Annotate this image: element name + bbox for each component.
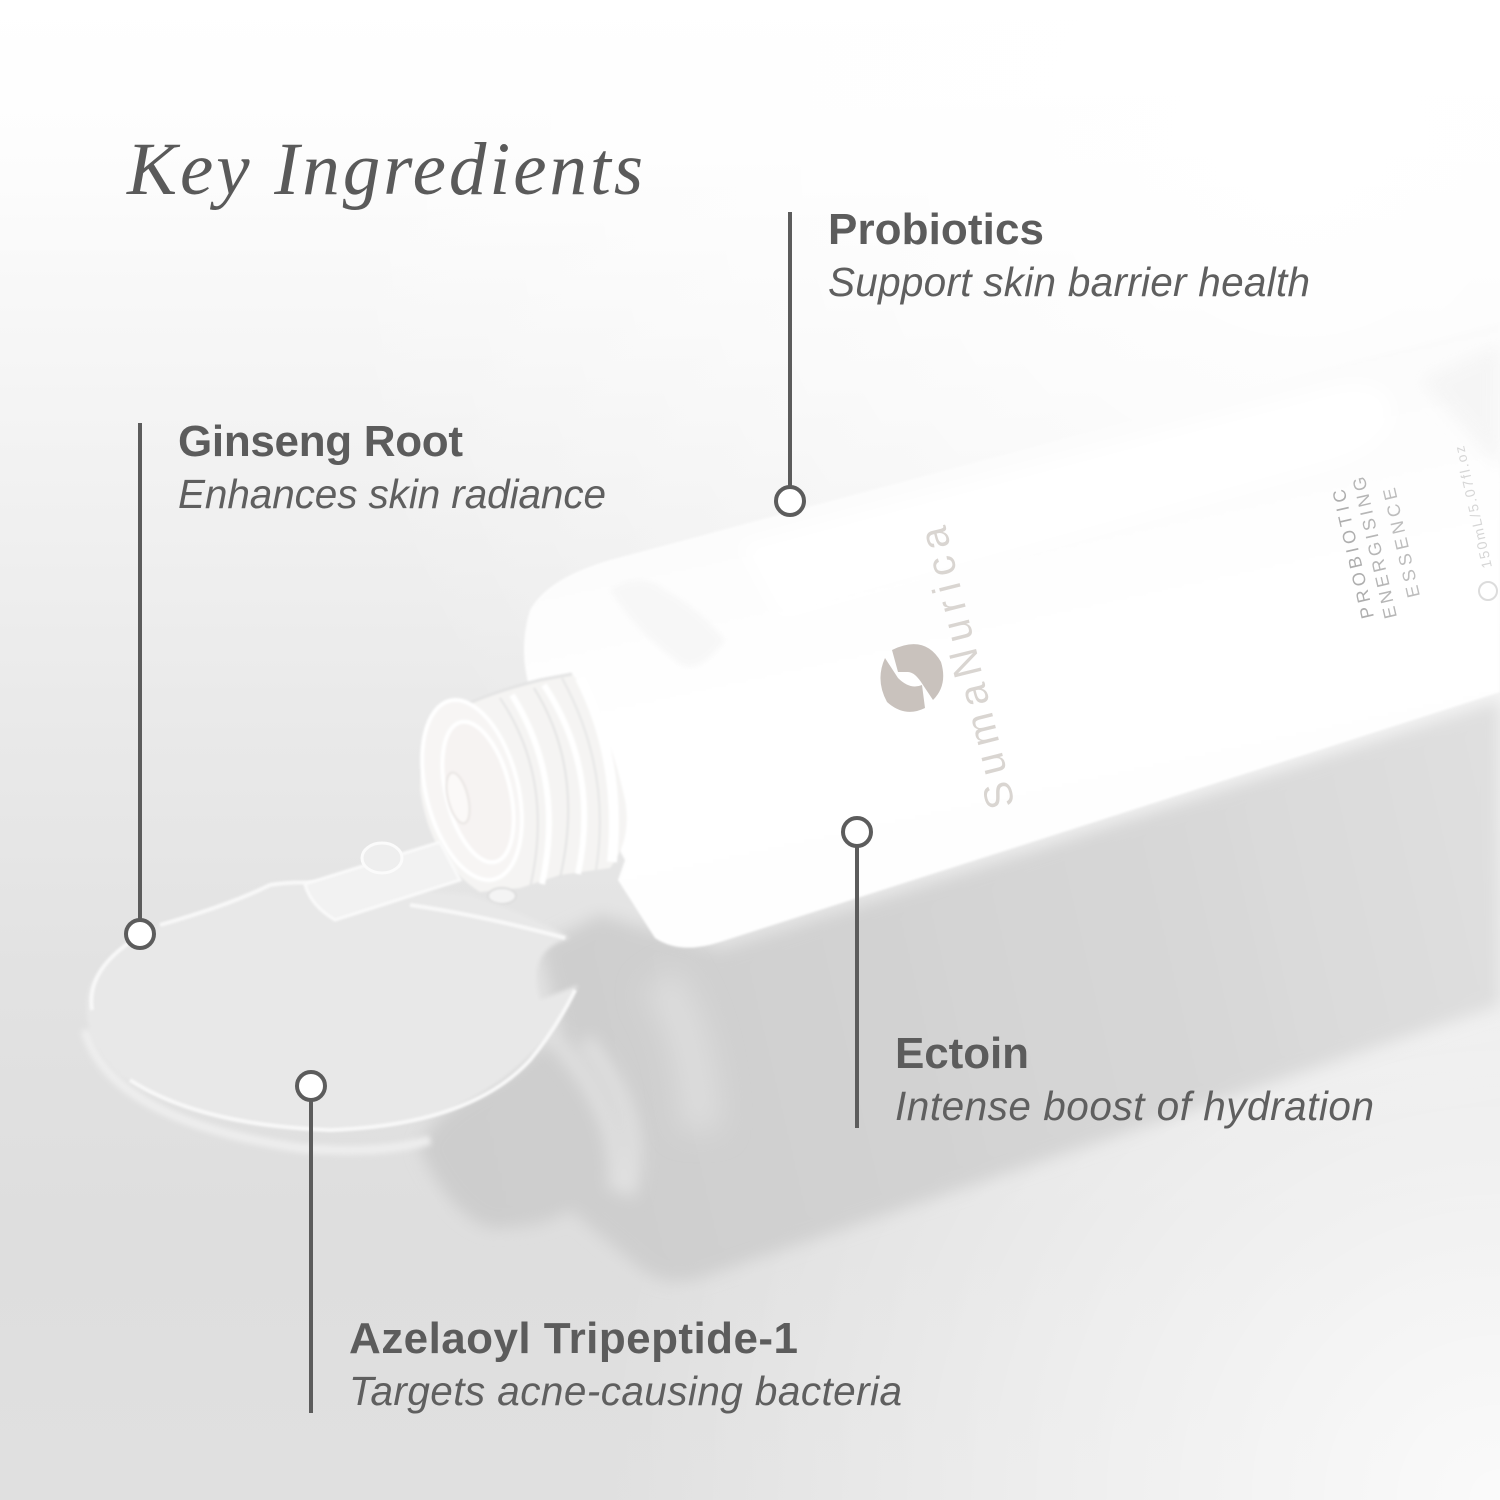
bottle brand logo xyxy=(880,644,943,712)
bottle body xyxy=(524,322,1500,948)
callout: Ginseng Root xyxy=(126,417,606,948)
essence puddle xyxy=(85,842,578,1150)
callout: Probiotics: Probiotics xyxy=(828,205,1044,254)
liquid droplets in shoulder xyxy=(610,580,725,667)
right bottle shade xyxy=(1420,345,1500,470)
callout: Ectoin: Ectoin xyxy=(895,1029,1029,1078)
callout: Ginseng Root: Ginseng Root xyxy=(178,417,463,466)
puddle body xyxy=(86,882,578,1130)
bottle product name xyxy=(1329,475,1424,621)
bottle reflection xyxy=(420,700,1500,1281)
callout: Ectoin xyxy=(843,818,1374,1129)
liquid stream xyxy=(305,842,460,920)
bottle product name: ESSENCE xyxy=(1379,486,1424,600)
bottle brand name: SumaNurica xyxy=(911,522,1024,813)
callout: Azelaoyl Tripeptide-1 xyxy=(297,1072,902,1414)
callout: Ectoin: Intense boost of hydration xyxy=(895,1083,1374,1129)
callout: Ginseng Root: Enhances skin radiance xyxy=(178,471,606,517)
bottle top shine xyxy=(740,384,1392,620)
reflection body xyxy=(420,700,1500,1281)
callout: Azelaoyl Tripeptide-1: Targets acne-causing bacteria xyxy=(349,1368,902,1414)
bottle product name: PROBIOTIC xyxy=(1329,487,1378,621)
bottle volume: 150mL/5.07fl.oz xyxy=(1451,445,1495,570)
stream bubble xyxy=(362,843,402,873)
reflection neck highlights xyxy=(545,1030,634,1195)
callout: Probiotics xyxy=(776,205,1310,515)
puddle outer rim xyxy=(85,1030,430,1150)
puddle rim xyxy=(91,882,575,1130)
title: Key Ingredients xyxy=(126,128,643,211)
bottle product name: ENERGISING xyxy=(1349,475,1401,621)
callout: Probiotics: Support skin barrier health xyxy=(828,259,1310,305)
product bottle xyxy=(405,322,1500,948)
glass neck xyxy=(405,674,627,904)
reflection shoulder highlight xyxy=(660,980,700,1130)
callout: Azelaoyl Tripeptide-1: Azelaoyl Tripeptide-1 xyxy=(349,1314,798,1363)
